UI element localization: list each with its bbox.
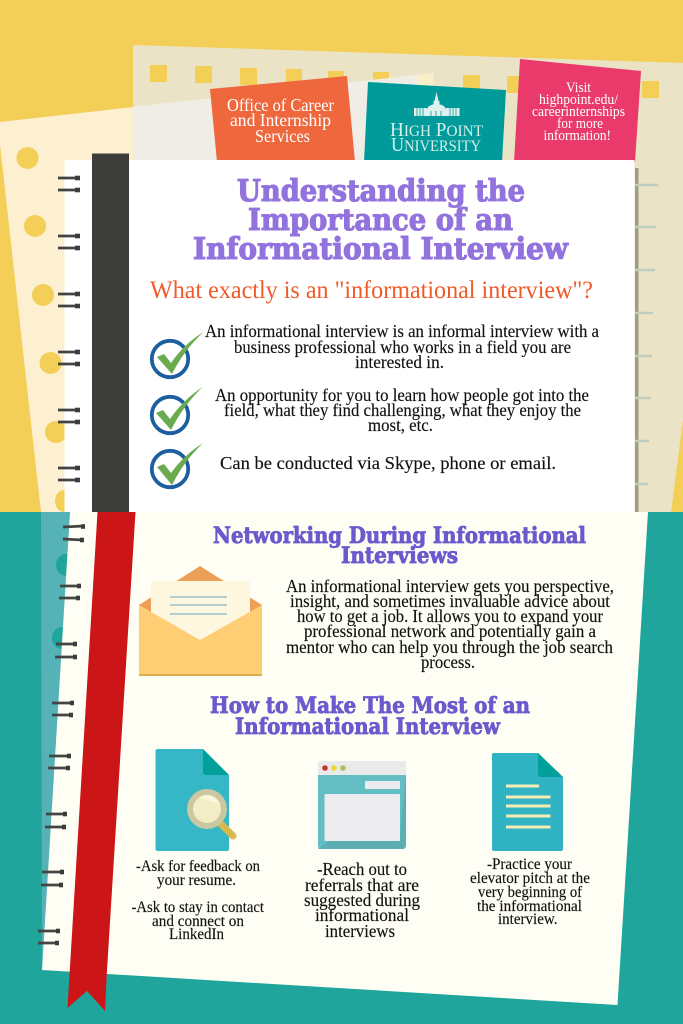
text block: networking paragraph — [286, 576, 614, 672]
tab: visit website — [514, 59, 641, 162]
icon: document with magnifier — [156, 749, 233, 851]
panel: cream notebook page — [42, 512, 648, 1005]
text block: networking paragraph: professional network and potentially gain a — [304, 621, 596, 641]
text block: opportunity: most, etc. — [368, 415, 433, 435]
title: Understanding the — [237, 174, 525, 209]
text block: networking paragraph: how to get a job. It allows you to expand your — [297, 606, 603, 626]
tab: visit website: for more — [557, 116, 603, 132]
text block: elevator pitch tip — [470, 856, 590, 928]
bottom back sheet strip — [41, 512, 76, 970]
text block: referrals tip: referrals that are — [305, 875, 419, 895]
text block: networking paragraph: An informational interview gets you perspective, — [286, 576, 614, 596]
title: Informational Interview — [193, 232, 569, 267]
tab: visit website: highpoint.edu/ — [539, 92, 619, 108]
text block: referrals tip: interviews — [325, 921, 395, 941]
text block: feedback tips: LinkedIn — [169, 926, 224, 943]
tab: High Point University logo — [364, 82, 506, 162]
background: yellow top section — [0, 0, 683, 512]
heading: how to make the most: Informational Interview — [235, 714, 501, 740]
text block: definition — [205, 321, 599, 372]
heading: how to make the most — [210, 693, 530, 740]
text block: feedback tips: -Ask to stay in contact — [132, 899, 265, 916]
text block: opportunity: field, what they find challenging, what they enjoy the — [224, 400, 581, 420]
icon: check 2 — [152, 387, 202, 433]
text block: opportunity: An opportunity for you to learn how people got into the — [215, 385, 589, 405]
title: Importance of an — [248, 203, 513, 238]
tab: Office of Career and Internship Services: Services — [255, 126, 310, 146]
tab: High Point University logo: HIGH POINT — [390, 119, 483, 141]
text block: feedback tips — [132, 858, 265, 943]
title — [193, 174, 569, 267]
spiral rings: bottom notebook — [38, 526, 85, 943]
text block: referrals tip: informational — [315, 905, 409, 925]
text block: definition: An informational interview is an informal interview with a — [205, 321, 599, 341]
heading: how to make the most: How to Make The Most of an — [210, 693, 530, 719]
middle paper: cream sheet with round holes — [0, 73, 440, 512]
red ribbon bookmark — [68, 512, 136, 1011]
tab: visit website: careerinternships — [532, 104, 625, 120]
tab: Office of Career and Internship Services: and Internship — [230, 110, 331, 130]
background: teal bottom section — [0, 512, 683, 1024]
text block: networking paragraph: mentor who can help you through the job search — [286, 637, 613, 657]
heading: networking — [213, 523, 586, 569]
panel: white notebook page — [64, 160, 634, 512]
text block: elevator pitch tip: the informational — [477, 898, 583, 915]
icon: envelope — [139, 566, 262, 676]
subheading: What exactly is an "informational interview"? — [150, 277, 593, 304]
text block: opportunity — [215, 385, 589, 435]
text block: definition: business professional who works in a field you are — [234, 337, 571, 357]
tab: visit website: Visit — [566, 80, 591, 96]
text block: how conducted: Can be conducted via Skype, phone or email. — [220, 453, 556, 473]
tab: Office of Career and Internship Services — [210, 76, 355, 162]
spiral rings: top notebook — [58, 178, 80, 480]
text block: networking paragraph: process. — [421, 652, 475, 672]
heading: networking: Networking During Informational — [213, 523, 586, 549]
tab: High Point University logo: UNIVERSITY — [391, 134, 481, 156]
text block: elevator pitch tip: very beginning of — [478, 884, 583, 901]
icon: check 3 — [152, 443, 203, 487]
text block: feedback tips: -Ask for feedback on — [136, 858, 260, 875]
icon: check 1 — [152, 332, 204, 377]
text block: elevator pitch tip: -Practice your — [487, 856, 573, 873]
text block: referrals tip: suggested during — [304, 890, 420, 910]
text block: referrals tip — [304, 859, 420, 941]
back paper: beige sheet with square holes — [133, 45, 683, 512]
text block: feedback tips: your resume. — [157, 872, 236, 889]
tab: visit website: information! — [544, 128, 611, 144]
page edge shadow and ruled lines — [635, 168, 658, 512]
notebook dark binding — [92, 154, 129, 512]
tab: Office of Career and Internship Services: Office of Career — [227, 95, 334, 115]
text block: elevator pitch tip: elevator pitch at the — [470, 870, 590, 887]
text block: networking paragraph: insight, and sometimes invaluable advice about — [290, 591, 610, 611]
text block: referrals tip: -Reach out to — [317, 859, 407, 879]
text block: elevator pitch tip: interview. — [498, 911, 558, 928]
icon: university building — [414, 92, 460, 116]
icon: browser window — [318, 761, 406, 849]
heading: networking: Interviews — [341, 543, 458, 569]
icon: document with lines — [492, 753, 563, 851]
text block: feedback tips: and connect on — [152, 913, 244, 930]
text block: definition: interested in. — [355, 352, 444, 372]
